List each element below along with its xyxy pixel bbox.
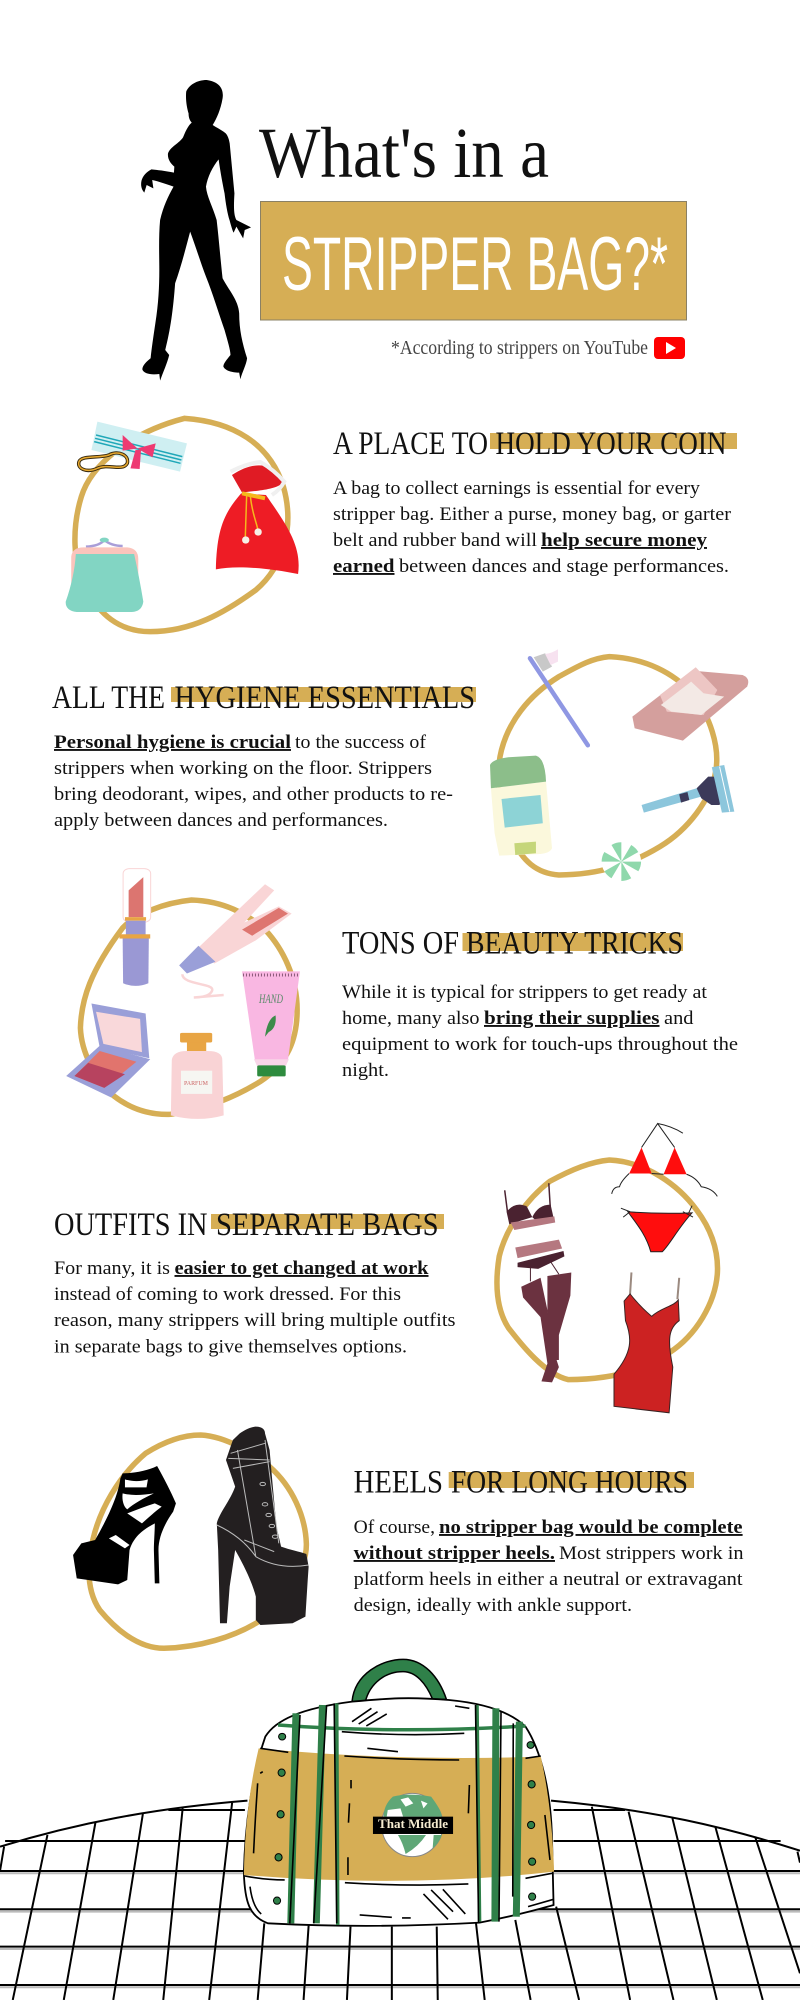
illustration: coin holders — [66, 418, 299, 632]
heading — [342, 926, 683, 962]
heading — [52, 680, 476, 716]
floor grid — [0, 1801, 800, 2000]
illustration: hygiene items — [490, 649, 748, 881]
icon: stockings — [521, 1272, 571, 1382]
heading: TONS OF — [342, 926, 459, 962]
body text — [54, 732, 453, 831]
heading: BEAUTY TRICKS — [466, 926, 683, 962]
ring — [498, 657, 717, 875]
panel: outfits — [54, 1124, 718, 1413]
icon: garter belt — [515, 1240, 564, 1281]
body text: instead of coming to work dressed. For this — [54, 1284, 401, 1305]
icon: platform boot — [217, 1427, 309, 1625]
icon: bikini bottom — [621, 1206, 693, 1252]
body text: without stripper heels. — [354, 1543, 555, 1564]
heading: HEELS — [354, 1465, 443, 1501]
icon: garter — [91, 422, 187, 472]
hand cream label: HAND — [258, 991, 283, 1006]
icon: hand cream — [242, 971, 300, 1076]
body text: strippers when working on the floor. Strippers — [54, 758, 432, 779]
icon: deodorant — [490, 756, 552, 856]
body text: to the success of — [295, 732, 427, 753]
icon: toothbrush — [530, 649, 588, 745]
body text: While it is typical for strippers to get ready at — [342, 982, 708, 1003]
body text: and — [664, 1008, 694, 1029]
body text: Personal hygiene is crucial — [54, 732, 291, 753]
body text: apply between dances and performances. — [54, 810, 388, 831]
gold band — [244, 1748, 554, 1881]
body text: no stripper bag would be complete — [439, 1517, 743, 1538]
icon: red dress — [614, 1272, 679, 1413]
panel: hold your coin — [66, 418, 737, 632]
heading: A PLACE TO — [333, 426, 488, 462]
icon: mint candy — [602, 842, 641, 881]
heading — [54, 1207, 444, 1243]
heading: SEPARATE BAGS — [216, 1207, 438, 1243]
illustration: heels — [73, 1427, 309, 1648]
body text: equipment to work for touch-ups throughout the — [342, 1034, 738, 1055]
body text: night. — [342, 1060, 389, 1081]
body text: bring their supplies — [484, 1008, 660, 1029]
illustration: beauty items — [66, 869, 300, 1119]
body text: in separate bags to give themselves options. — [54, 1336, 407, 1358]
icon: bra — [505, 1183, 555, 1230]
bag handle — [352, 1659, 446, 1702]
body text: help secure money — [541, 530, 708, 551]
logo wordmark: That Middle — [378, 1816, 448, 1831]
icon: razor — [642, 765, 734, 813]
body text: platform heels in either a neutral or extravagant — [354, 1569, 743, 1590]
panel: hygiene essentials — [52, 649, 748, 881]
body text: Most strippers work in — [559, 1543, 744, 1564]
body text: reason, many strippers will bring multiple outfits — [54, 1310, 456, 1331]
icon: woman silhouette — [141, 80, 251, 381]
body text: bring deodorant, wipes, and other products to re- — [54, 784, 453, 805]
body text — [54, 1258, 456, 1358]
title banner — [260, 202, 686, 320]
body text: stripper bag. Either a purse, money bag, or garter — [333, 504, 732, 525]
illustration: outfits — [497, 1124, 718, 1413]
heading: FOR LONG HOURS — [451, 1465, 688, 1501]
body text: design, ideally with ankle support. — [354, 1595, 632, 1616]
body text — [333, 478, 732, 577]
footnote: *According to strippers on YouTube — [391, 337, 648, 359]
body text: earned — [333, 556, 395, 577]
body text: belt and rubber band will — [333, 530, 537, 551]
body text — [342, 982, 738, 1081]
heading — [333, 426, 737, 462]
icon: bikini top — [612, 1124, 717, 1196]
heading — [354, 1465, 694, 1501]
panel: beauty tricks — [66, 869, 738, 1119]
body text — [354, 1517, 744, 1616]
ring — [497, 1160, 718, 1380]
stitching lines — [245, 1703, 554, 1923]
bag body — [244, 1698, 554, 1926]
globe logo — [373, 1793, 453, 1857]
icon: perfume — [171, 1033, 224, 1119]
icon: wipes — [632, 667, 748, 741]
icon: purse — [66, 538, 143, 612]
icon: YouTube — [654, 337, 685, 359]
heading: HYGIENE ESSENTIALS — [174, 680, 475, 716]
perfume label: PARFUM — [184, 1081, 209, 1087]
icon: blush compact — [66, 1004, 150, 1097]
heading: HOLD YOUR COIN — [496, 426, 727, 462]
body text: home, many also — [342, 1008, 480, 1029]
ring — [89, 1435, 306, 1648]
ring — [80, 900, 297, 1114]
rivets — [273, 1733, 536, 1904]
ring — [75, 418, 288, 632]
header — [141, 80, 686, 381]
icon: rubber band — [79, 453, 128, 470]
body text: easier to get changed at work — [174, 1258, 429, 1279]
body text: A bag to collect earnings is essential for every — [333, 478, 701, 499]
body text: For many, it is — [54, 1258, 170, 1279]
icon: strappy sandal — [73, 1466, 176, 1584]
icon: hair straightener — [179, 884, 292, 997]
icon: lipstick — [119, 869, 151, 986]
icon: money bag — [216, 462, 299, 574]
body text: Of course, — [354, 1517, 435, 1538]
heading: ALL THE — [52, 680, 165, 716]
heading: OUTFITS IN — [54, 1207, 208, 1243]
body text: between dances and stage performances. — [399, 556, 729, 577]
straps — [278, 1703, 526, 1925]
panel: heels — [73, 1427, 744, 1648]
illustration: bag — [244, 1659, 554, 1926]
title line: What's in a — [259, 113, 549, 193]
